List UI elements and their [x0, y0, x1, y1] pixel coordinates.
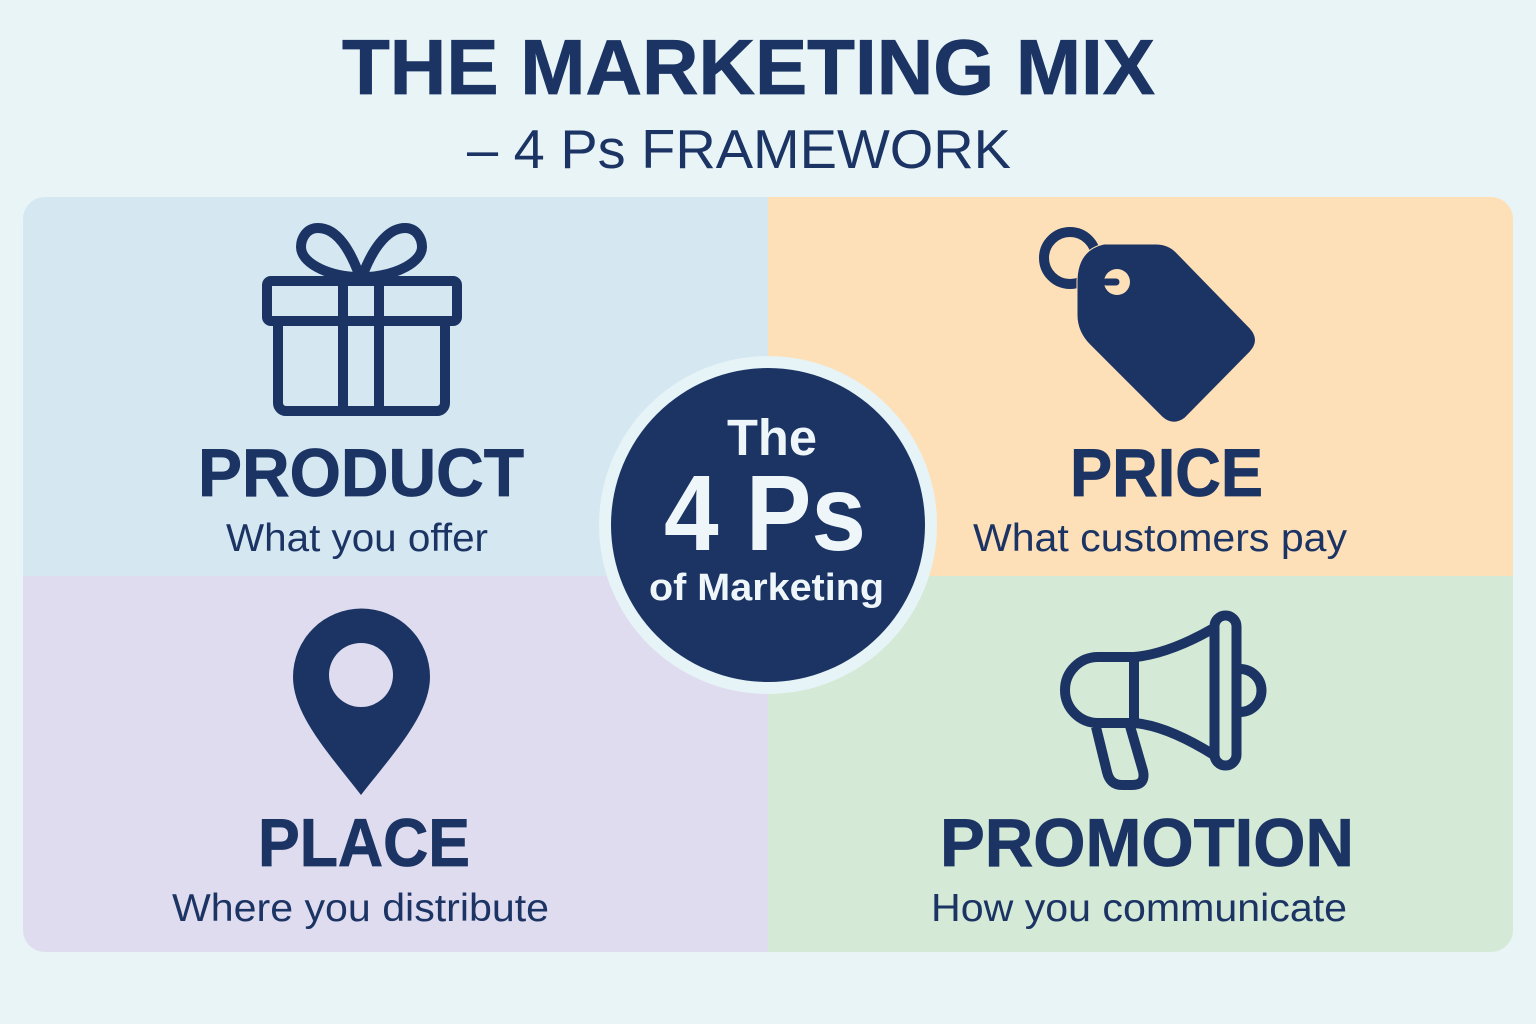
- panel: product: [198, 228, 524, 560]
- heading: price: PRICE: [1070, 435, 1263, 511]
- subheading: – 4 Ps FRAMEWORK: [467, 118, 1011, 180]
- text: place description: Where you distribute: [172, 887, 549, 930]
- panel: place: [172, 608, 549, 930]
- title: [342, 23, 1155, 180]
- heading: promotion: PROMOTION: [940, 805, 1354, 881]
- text: promotion description: How you communicate: [931, 887, 1347, 930]
- center badge: [599, 356, 937, 694]
- icon: location pin: [293, 608, 430, 795]
- text: 4 Ps: 4 Ps: [664, 452, 866, 573]
- text: product description: What you offer: [226, 517, 488, 560]
- panel: promotion: [931, 616, 1354, 930]
- panel: quadrant backgrounds: [23, 197, 1513, 952]
- icon: megaphone: [1065, 616, 1262, 785]
- icon: price tag: [1044, 232, 1256, 422]
- text: price description: What customers pay: [973, 517, 1348, 560]
- heading: place: PLACE: [258, 805, 470, 881]
- panel: price: [973, 232, 1348, 560]
- heading: product: PRODUCT: [198, 435, 524, 511]
- text: of marketing: of Marketing: [649, 567, 884, 609]
- icon: gift box: [267, 228, 457, 411]
- text: the: The: [727, 409, 817, 466]
- main heading: THE MARKETING MIX: [342, 23, 1155, 111]
